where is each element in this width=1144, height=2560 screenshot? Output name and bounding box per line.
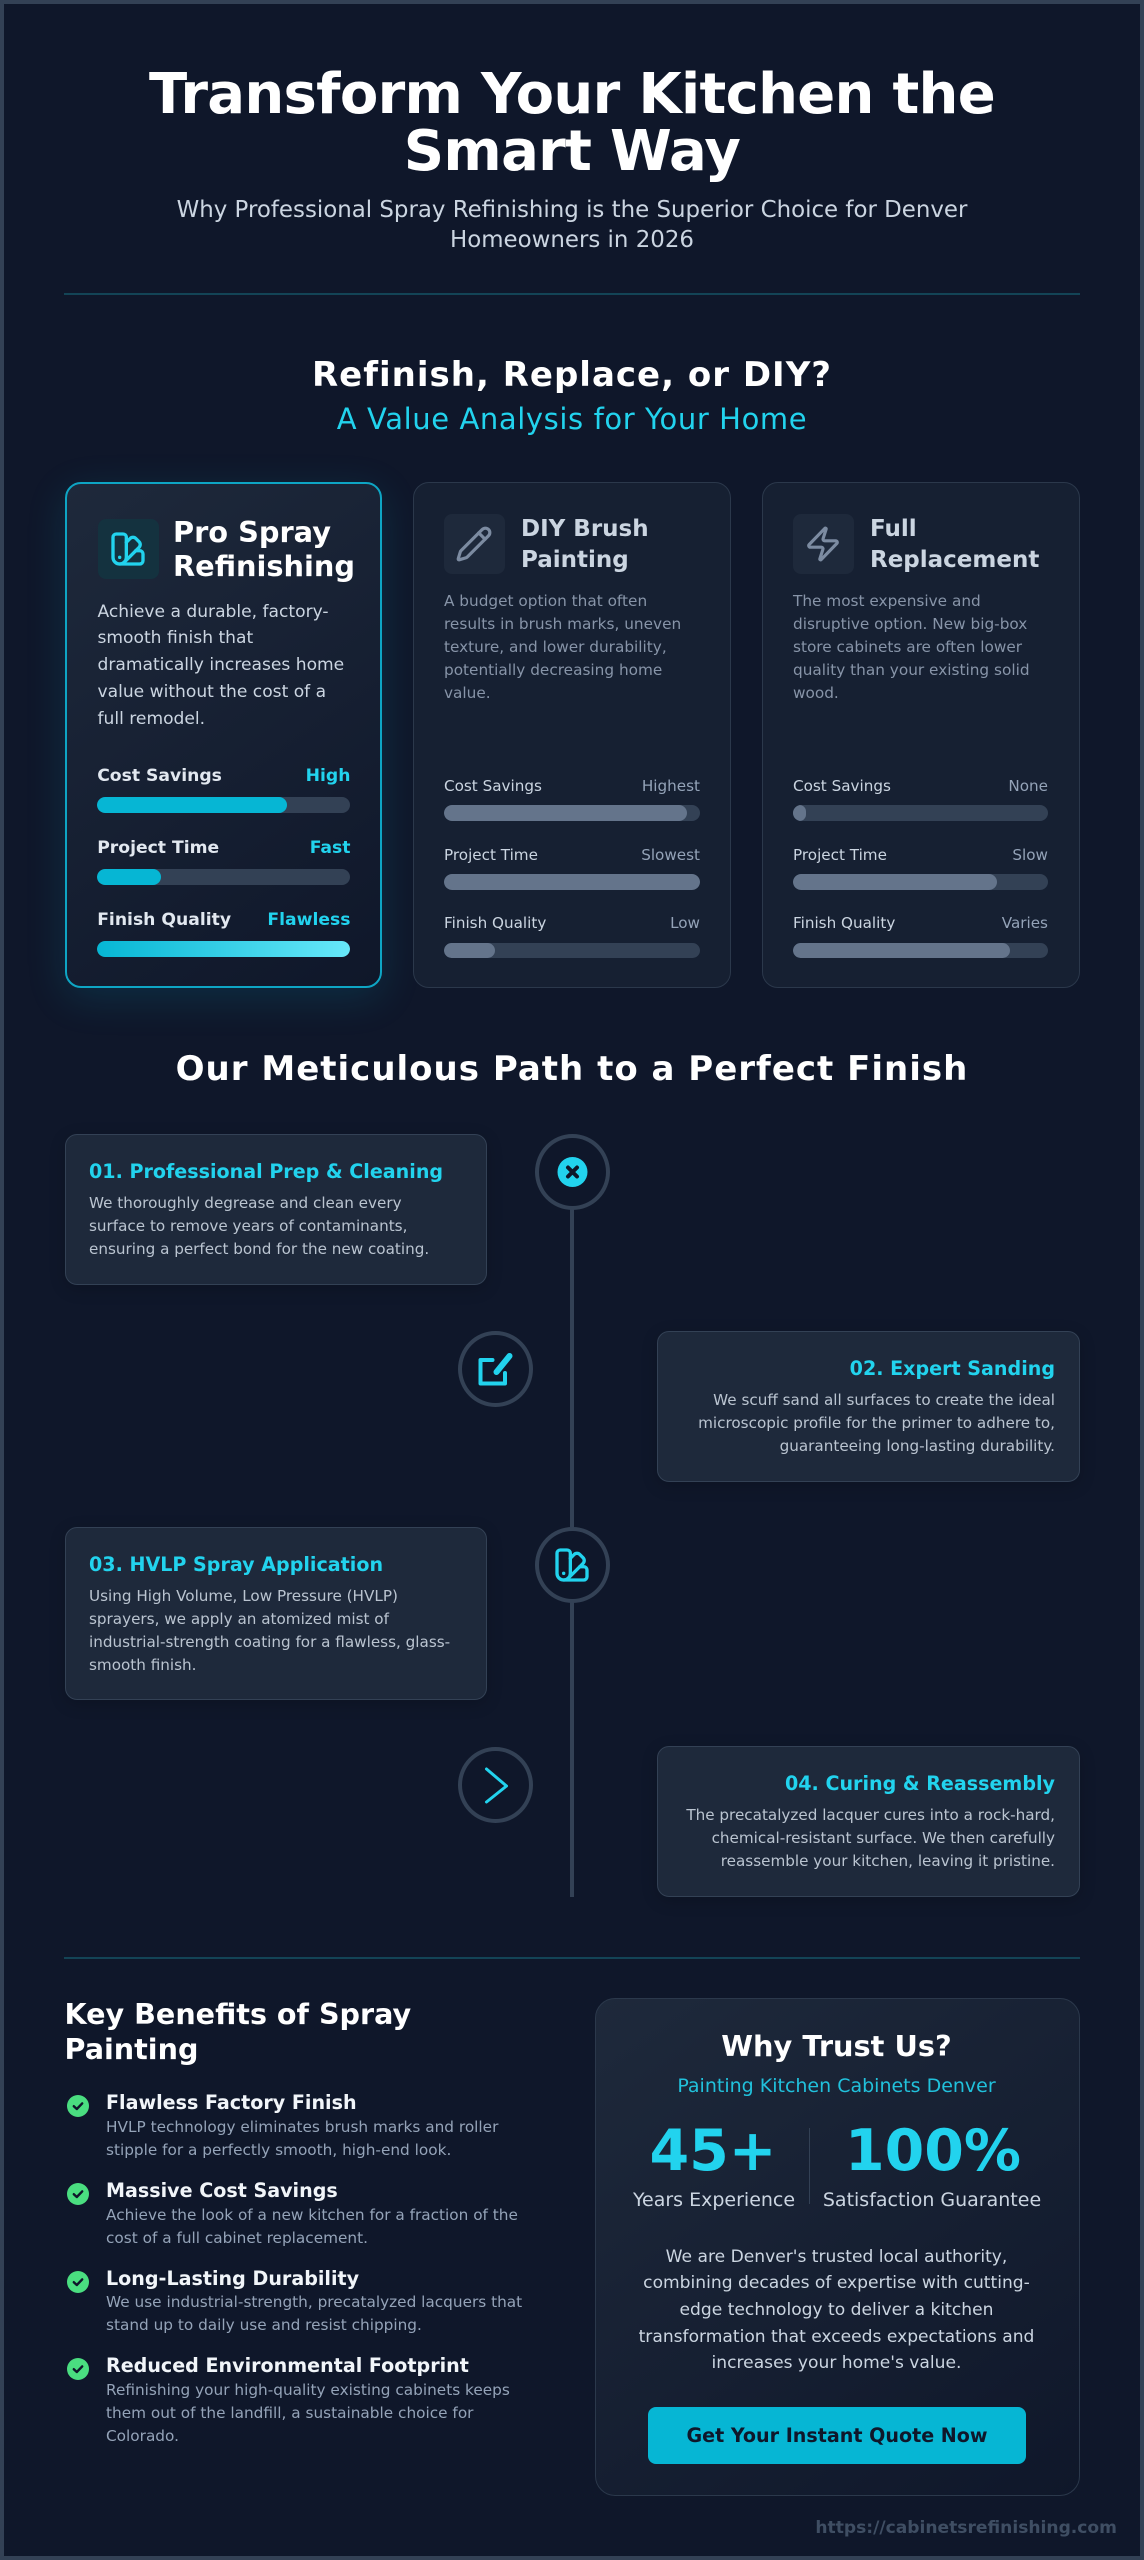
- benefit 3: We use industrial-strength, precatalyzed lacquers that: [106, 2293, 522, 2311]
- icon: pencil: [444, 514, 505, 574]
- subheading: value analysis: A Value Analysis for Your Home: [337, 402, 807, 436]
- metric: finish quality: Low: [670, 914, 700, 932]
- trust paragraph: increases your home's value.: [712, 2353, 961, 2373]
- card title: Pro Spray: [173, 515, 331, 549]
- card description: store cabinets are often lower: [793, 638, 1022, 656]
- card description: disruptive option. New big-box: [793, 615, 1027, 633]
- title: Transform Your Kitchen the: [149, 62, 995, 127]
- icon: step 2 sanding: [458, 1331, 533, 1407]
- metric: finish quality: [444, 914, 700, 958]
- card description: smooth finish that: [98, 628, 253, 648]
- trust paragraph: transformation that exceeds expectations and: [639, 2327, 1034, 2347]
- subtitle: Homeowners in 2026: [450, 227, 694, 253]
- benefit 2: Achieve the look of a new kitchen for a fraction of the: [106, 2206, 518, 2224]
- metric: project time: Slow: [1012, 846, 1048, 864]
- heading: value analysis: Refinish, Replace, or DIY?: [312, 355, 832, 395]
- card description: [792, 592, 1030, 702]
- metric: finish quality: [793, 914, 1048, 958]
- metric: cost savings: Cost Savings: [793, 777, 891, 795]
- card description: full remodel.: [98, 709, 205, 729]
- benefit 2: cost of a full cabinet replacement.: [106, 2229, 368, 2247]
- icon: step 1 cleaning: [535, 1134, 610, 1210]
- card description: value.: [444, 684, 491, 702]
- step 1 card: 01. Professional Prep & Cleaning: [89, 1160, 443, 1183]
- metric: finish quality: Finish Quality: [793, 914, 895, 932]
- trust heading: Why Trust Us?: [721, 2029, 952, 2063]
- card description: A budget option that often: [444, 592, 647, 610]
- metric: cost savings: High: [306, 766, 350, 786]
- trust paragraph: combining decades of expertise with cutting-: [643, 2273, 1030, 2293]
- step 4 card: reassemble your kitchen, leaving it pristine.: [721, 1852, 1055, 1870]
- benefit 4: Reduced Environmental Footprint: [106, 2354, 469, 2377]
- card title: Refinishing: [173, 549, 355, 583]
- heading: process: Our Meticulous Path to a Perfect Finish: [176, 1049, 968, 1089]
- metric: project time: Project Time: [793, 846, 887, 864]
- heading: key benefits: [64, 1996, 411, 2066]
- stat label: years: Years Experience: [633, 2189, 795, 2211]
- card description: The most expensive and: [793, 592, 981, 610]
- metric: cost savings: None: [1008, 777, 1048, 795]
- stat: years: 45+: [649, 2118, 777, 2184]
- panel: full replacement: [762, 482, 1080, 988]
- step 2 card: guaranteeing long-lasting durability.: [780, 1437, 1055, 1455]
- card description: results in brush marks, uneven: [444, 615, 681, 633]
- icon: step 3 spray: [534, 1527, 610, 1603]
- stat label: satisfaction: Satisfaction Guarantee: [823, 2189, 1041, 2211]
- card description: potentially decreasing home: [444, 661, 662, 679]
- step 3 card: smooth finish.: [89, 1656, 196, 1674]
- step 3 card: 03. HVLP Spray Application: [89, 1553, 383, 1576]
- card title: Full: [870, 516, 917, 542]
- step 3 card: sprayers, we apply an atomized mist of: [89, 1610, 389, 1628]
- trust subheading: Painting Kitchen Cabinets Denver: [677, 2074, 996, 2096]
- panel: why trust us: [595, 1998, 1080, 2496]
- metric: cost savings: [444, 777, 700, 821]
- metric: project time: [793, 846, 1048, 890]
- metric: project time: Project Time: [444, 846, 538, 864]
- benefit 4: them out of the landfill, a sustainable choice for: [106, 2404, 473, 2422]
- metric: finish quality: Flawless: [267, 910, 350, 930]
- button: instant quote: Get Your Instant Quote Now: [686, 2424, 988, 2447]
- step 4 card: 04. Curing & Reassembly: [785, 1772, 1055, 1795]
- benefit 3: Long-Lasting Durability: [106, 2267, 359, 2290]
- step 1 card: [64, 1134, 486, 1285]
- card title: Painting: [521, 547, 629, 573]
- metric: cost savings: Cost Savings: [444, 777, 542, 795]
- step 3 card: Using High Volume, Low Pressure (HVLP): [89, 1587, 398, 1605]
- heading: key benefits: Key Benefits of Spray: [64, 1996, 411, 2030]
- footer url: https://cabinetsrefinishing.com: [815, 2518, 1117, 2538]
- text: Colorado.: [106, 2427, 179, 2445]
- metric: project time: Fast: [310, 838, 350, 858]
- card title: [521, 516, 649, 573]
- card title: Replacement: [870, 547, 1039, 573]
- panel: pro spray refinishing: [64, 482, 382, 988]
- metric: cost savings: [793, 777, 1048, 821]
- title: Smart Way: [404, 119, 740, 184]
- title: [149, 62, 995, 184]
- benefit 1: stipple for a perfectly smooth, high-end look.: [106, 2141, 451, 2159]
- step 3 card: industrial-strength coating for a flawless, glass-: [89, 1633, 450, 1651]
- trust paragraph: [639, 2247, 1034, 2373]
- trust paragraph: We are Denver's trusted local authority,: [666, 2247, 1007, 2267]
- step 1 card: ensuring a perfect bond for the new coating.: [89, 1240, 429, 1258]
- step 2 card: [657, 1331, 1080, 1482]
- metric: project time: [97, 838, 350, 885]
- step 1 card: surface to remove years of contaminants,: [89, 1217, 407, 1235]
- step 1 card: We thoroughly degrease and clean every: [89, 1194, 402, 1212]
- stat: satisfaction: 100%: [845, 2118, 1021, 2184]
- card description: quality than your existing solid: [793, 661, 1030, 679]
- benefit 1: Flawless Factory Finish: [106, 2091, 357, 2114]
- step 3 card: [64, 1527, 486, 1700]
- card description: value without the cost of a: [98, 682, 326, 702]
- icon: lightning bolt: [793, 514, 854, 574]
- benefit 3: [67, 2267, 522, 2334]
- panel: diy brush painting: [413, 482, 731, 988]
- card description: Achieve a durable, factory-: [98, 602, 329, 622]
- metric: cost savings: [97, 766, 350, 813]
- step 2 card: microscopic profile for the primer to adhere to,: [698, 1414, 1055, 1432]
- metric: finish quality: Varies: [1002, 914, 1048, 932]
- metric: cost savings: Highest: [642, 777, 700, 795]
- metric: finish quality: [97, 910, 350, 957]
- card description: wood.: [793, 684, 839, 702]
- step 4 card: The precatalyzed lacquer cures into a rock-hard,: [686, 1806, 1055, 1824]
- metric: project time: [444, 846, 700, 890]
- metric: project time: Slowest: [641, 846, 700, 864]
- trust paragraph: edge technology to deliver a kitchen: [680, 2300, 993, 2320]
- card title: [870, 516, 1039, 573]
- card title: [173, 515, 355, 583]
- button: instant quote: [648, 2407, 1026, 2464]
- card title: DIY Brush: [521, 516, 649, 542]
- card description: [98, 602, 344, 729]
- benefit 3: stand up to daily use and resist chipping.: [106, 2316, 422, 2334]
- step 4 card: [657, 1746, 1080, 1897]
- icon: step 4 chevron: [458, 1747, 533, 1823]
- card description: texture, and lower durability,: [444, 638, 667, 656]
- icon: swatch book: [98, 519, 158, 579]
- card description: dramatically increases home: [98, 655, 344, 675]
- benefit 2: [67, 2179, 518, 2247]
- benefit 1: HVLP technology eliminates brush marks and roller: [106, 2118, 498, 2136]
- step 2 card: 02. Expert Sanding: [850, 1357, 1055, 1380]
- metric: project time: Project Time: [97, 838, 219, 858]
- benefit 1: [67, 2091, 498, 2159]
- subtitle: Why Professional Spray Refinishing is the Superior Choice for Denver: [177, 197, 967, 223]
- metric: finish quality: Finish Quality: [97, 910, 231, 930]
- benefit 2: Massive Cost Savings: [106, 2179, 338, 2202]
- subtitle: [177, 197, 968, 253]
- metric: cost savings: Cost Savings: [97, 766, 222, 786]
- step 4 card: chemical-resistant surface. We then carefully: [712, 1829, 1055, 1847]
- benefit 4: Refinishing your high-quality existing cabinets keeps: [106, 2381, 510, 2399]
- benefit 4: [67, 2354, 510, 2445]
- heading: key benefits: Painting: [64, 2032, 198, 2066]
- metric: finish quality: Finish Quality: [444, 914, 546, 932]
- card description: [444, 592, 681, 702]
- step 2 card: We scuff sand all surfaces to create the ideal: [713, 1391, 1055, 1409]
